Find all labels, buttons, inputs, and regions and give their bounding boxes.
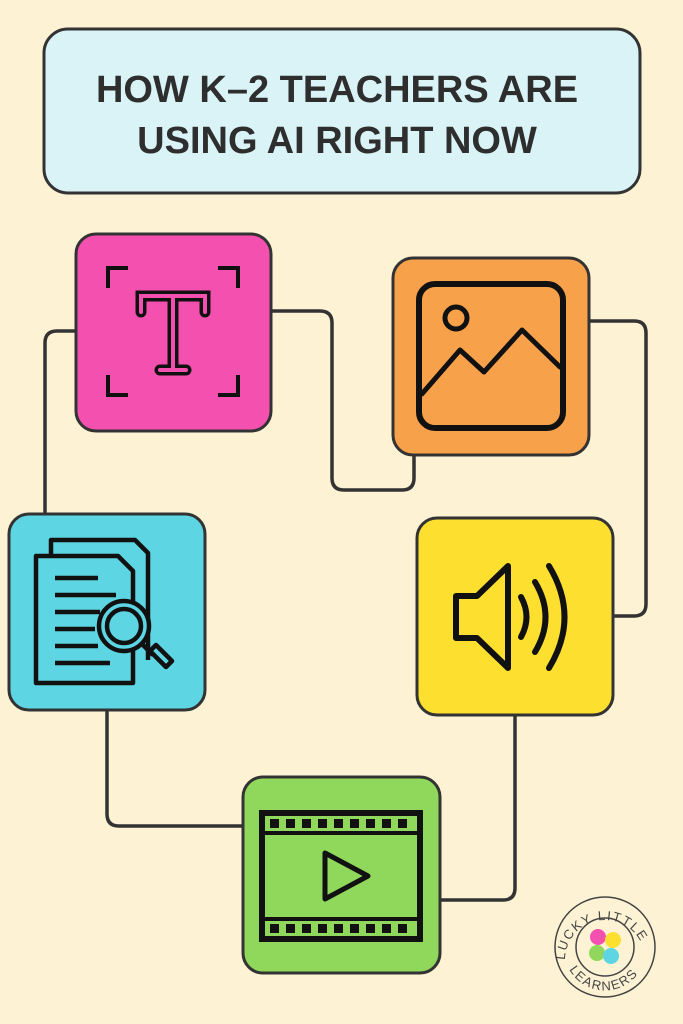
panel: image icon <box>393 258 589 455</box>
panel: document search icon <box>9 514 205 710</box>
panel: video icon <box>243 777 440 973</box>
logo: LUCKY LITTLE <box>556 911 648 959</box>
logo: LEARNERS <box>570 965 636 991</box>
title <box>44 29 640 193</box>
logo <box>554 896 656 998</box>
panel: sound icon <box>417 518 613 715</box>
title: HOW K–2 TEACHERS ARE <box>96 69 578 111</box>
title: USING AI RIGHT NOW <box>137 120 537 162</box>
panel: text icon <box>76 234 271 431</box>
